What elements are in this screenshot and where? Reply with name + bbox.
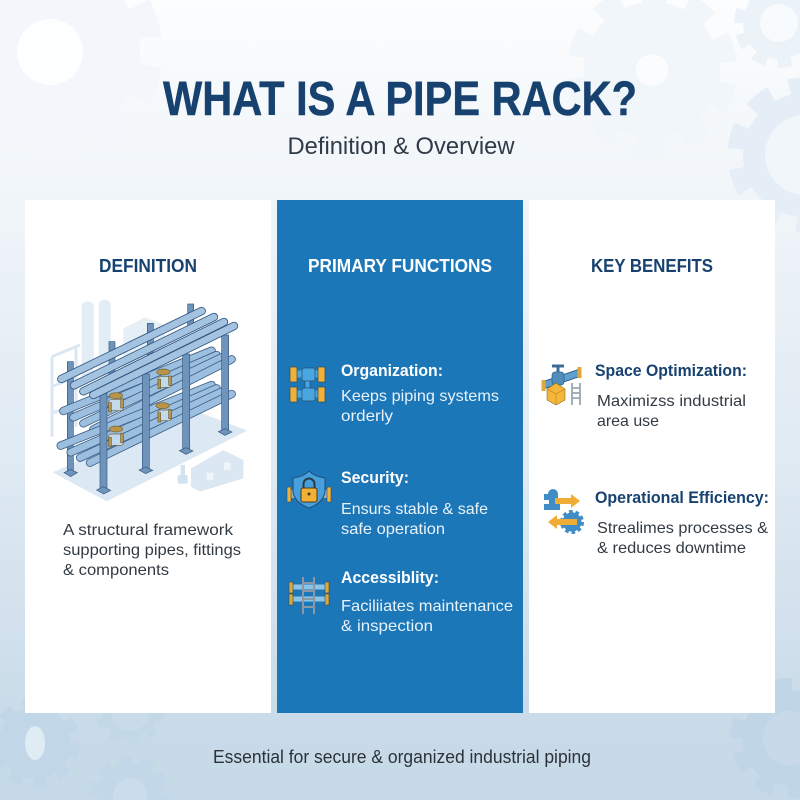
text: security: Security: xyxy=(341,468,409,487)
text: security: Ensurs stable & safe xyxy=(341,501,488,518)
subtitle: Definition & Overview xyxy=(288,133,515,160)
ground and faded plant backdrop xyxy=(52,300,247,501)
text: organization: orderly xyxy=(341,408,393,425)
equipment box xyxy=(178,450,243,492)
icon: accessibility xyxy=(289,577,329,614)
text: accessibility: Faciliiates maintenance xyxy=(341,598,513,615)
back columns xyxy=(64,304,194,477)
valves xyxy=(109,369,171,447)
text: operational efficiency: Operational Efficiency: xyxy=(595,488,769,507)
icon: organization xyxy=(290,367,325,402)
text: organization xyxy=(341,361,499,425)
text: operational efficiency: Strealimes processes & xyxy=(597,520,768,537)
panel: primary functions xyxy=(277,200,523,713)
text: space optimization: Space Optimization: xyxy=(595,361,747,380)
definition text xyxy=(63,522,241,579)
text: operational efficiency: & reduces downtime xyxy=(597,540,746,557)
text: organization: Keeps piping systems xyxy=(341,388,499,405)
definition text: supporting pipes, fittings xyxy=(63,542,241,559)
text: security xyxy=(341,468,488,538)
definition text: A structural framework xyxy=(63,522,234,539)
icon: security xyxy=(287,471,331,508)
heading: key benefits: KEY BENEFITS xyxy=(591,256,713,276)
footer tagline: Essential for secure & organized industrial piping xyxy=(213,747,591,767)
text: space optimization: Maximizss industrial xyxy=(597,393,746,410)
text: space optimization xyxy=(595,361,747,430)
text: organization: Organization: xyxy=(341,361,443,380)
icon: operational efficiency xyxy=(544,489,582,532)
illustration: pipe rack xyxy=(52,300,247,501)
text: operational efficiency xyxy=(595,488,769,557)
heading: primary functions: PRIMARY FUNCTIONS xyxy=(308,256,492,276)
text: accessibility xyxy=(341,568,513,635)
text: security: safe operation xyxy=(341,521,445,538)
title: WHAT IS A PIPE RACK? xyxy=(163,72,637,126)
icon: space optimization xyxy=(544,366,580,405)
front columns xyxy=(97,335,232,494)
top pipe row xyxy=(61,311,234,395)
panel: key benefits xyxy=(529,200,775,713)
lower and middle pipe rows xyxy=(61,351,232,463)
text: space optimization: area use xyxy=(597,413,659,430)
text: accessibility: Accessiblity: xyxy=(341,568,439,587)
text: accessibility: & inspection xyxy=(341,618,433,635)
panel: definition xyxy=(25,200,271,713)
heading: definition: DEFINITION xyxy=(99,256,197,276)
definition text: & components xyxy=(63,562,169,579)
